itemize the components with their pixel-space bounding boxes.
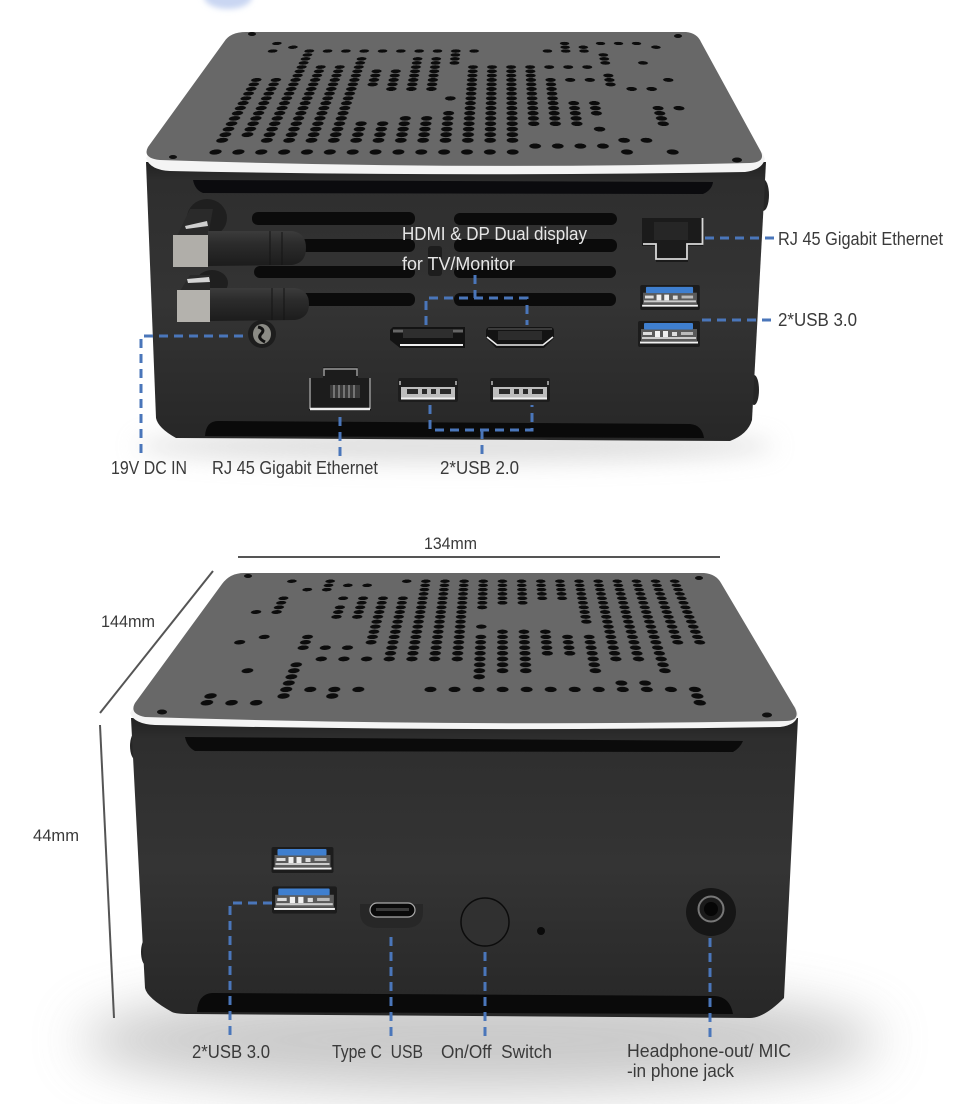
callout: USB 2.0 bbox=[430, 405, 532, 478]
callout: Type C USB bbox=[332, 937, 423, 1062]
vent holes on top plate of rear-view device bbox=[209, 42, 685, 155]
callout: front USB 3.0: 2*USB 3.0 bbox=[192, 1042, 270, 1062]
dimension: height: 44mm bbox=[33, 827, 79, 845]
power button bbox=[461, 898, 509, 946]
dimension: width: 134mm bbox=[424, 535, 477, 553]
dimension: depth bbox=[100, 571, 213, 713]
antenna connectors bbox=[173, 199, 309, 322]
top vent slot bbox=[185, 737, 743, 752]
lower RJ45 port bbox=[309, 367, 371, 411]
chassis body bbox=[146, 162, 766, 441]
callout: front USB 3.0 bbox=[192, 903, 272, 1062]
callout: RJ45 lower: RJ 45 Gigabit Ethernet bbox=[212, 458, 378, 478]
callout: headphone jack: Headphone-out/ MIC bbox=[627, 1041, 791, 1061]
vent slots in rear panel bbox=[252, 212, 617, 306]
vent holes on top plate of front-view device bbox=[200, 580, 706, 706]
callout: RJ45 right: RJ 45 Gigabit Ethernet bbox=[778, 229, 943, 249]
plate screws bbox=[157, 574, 772, 718]
plate screws bbox=[169, 32, 742, 162]
callout: headphone jack: -in phone jack bbox=[627, 1061, 735, 1081]
top plate with silver edge bbox=[146, 152, 765, 174]
callout: headphone jack bbox=[627, 938, 791, 1081]
rear USB 3.0 ports bbox=[638, 285, 700, 347]
power jack screw bbox=[248, 320, 276, 348]
dimension: depth: 144mm bbox=[101, 613, 155, 631]
device two: front view bbox=[130, 573, 798, 1018]
chassis body bbox=[131, 718, 798, 1018]
HDMI port bbox=[486, 327, 554, 348]
dimension: height bbox=[33, 725, 114, 1018]
bottom vent slot bbox=[205, 421, 704, 438]
corner blue glow bbox=[204, 0, 252, 9]
callout: Type C USB: Type C USB bbox=[332, 1042, 423, 1062]
callout: power switch bbox=[441, 952, 552, 1062]
display port bbox=[390, 327, 465, 348]
side bumps bbox=[749, 179, 769, 405]
front USB 3.0 ports bbox=[272, 847, 337, 914]
callout: power switch: On/Off Switch bbox=[441, 1042, 552, 1062]
rear RJ45 port bbox=[642, 218, 703, 262]
callout: DC in: 19V DC IN bbox=[111, 458, 187, 478]
headphone jack bbox=[686, 888, 736, 936]
top vent slot bbox=[193, 180, 713, 194]
bottom vent slot bbox=[197, 993, 733, 1014]
side bumps bbox=[130, 732, 151, 965]
callout: HDMI and DP dual display: HDMI & DP Dual display bbox=[402, 224, 587, 244]
top plate with silver edge bbox=[130, 706, 798, 729]
callout: USB 3.0 right: 2*USB 3.0 bbox=[778, 310, 857, 330]
callout: HDMI and DP dual display bbox=[402, 224, 587, 325]
USB-C port bbox=[360, 903, 423, 928]
callout: USB 2.0: 2*USB 2.0 bbox=[440, 458, 519, 478]
callout: HDMI and DP dual display: for TV/Monitor bbox=[402, 254, 515, 274]
callout: DC in bbox=[111, 336, 243, 478]
indicator light bbox=[537, 927, 545, 935]
floor shadow bottom device bbox=[80, 988, 880, 1092]
rear USB 2.0 ports bbox=[398, 378, 550, 402]
device one: rear view bbox=[146, 32, 769, 441]
floor shadow top device bbox=[135, 430, 775, 462]
